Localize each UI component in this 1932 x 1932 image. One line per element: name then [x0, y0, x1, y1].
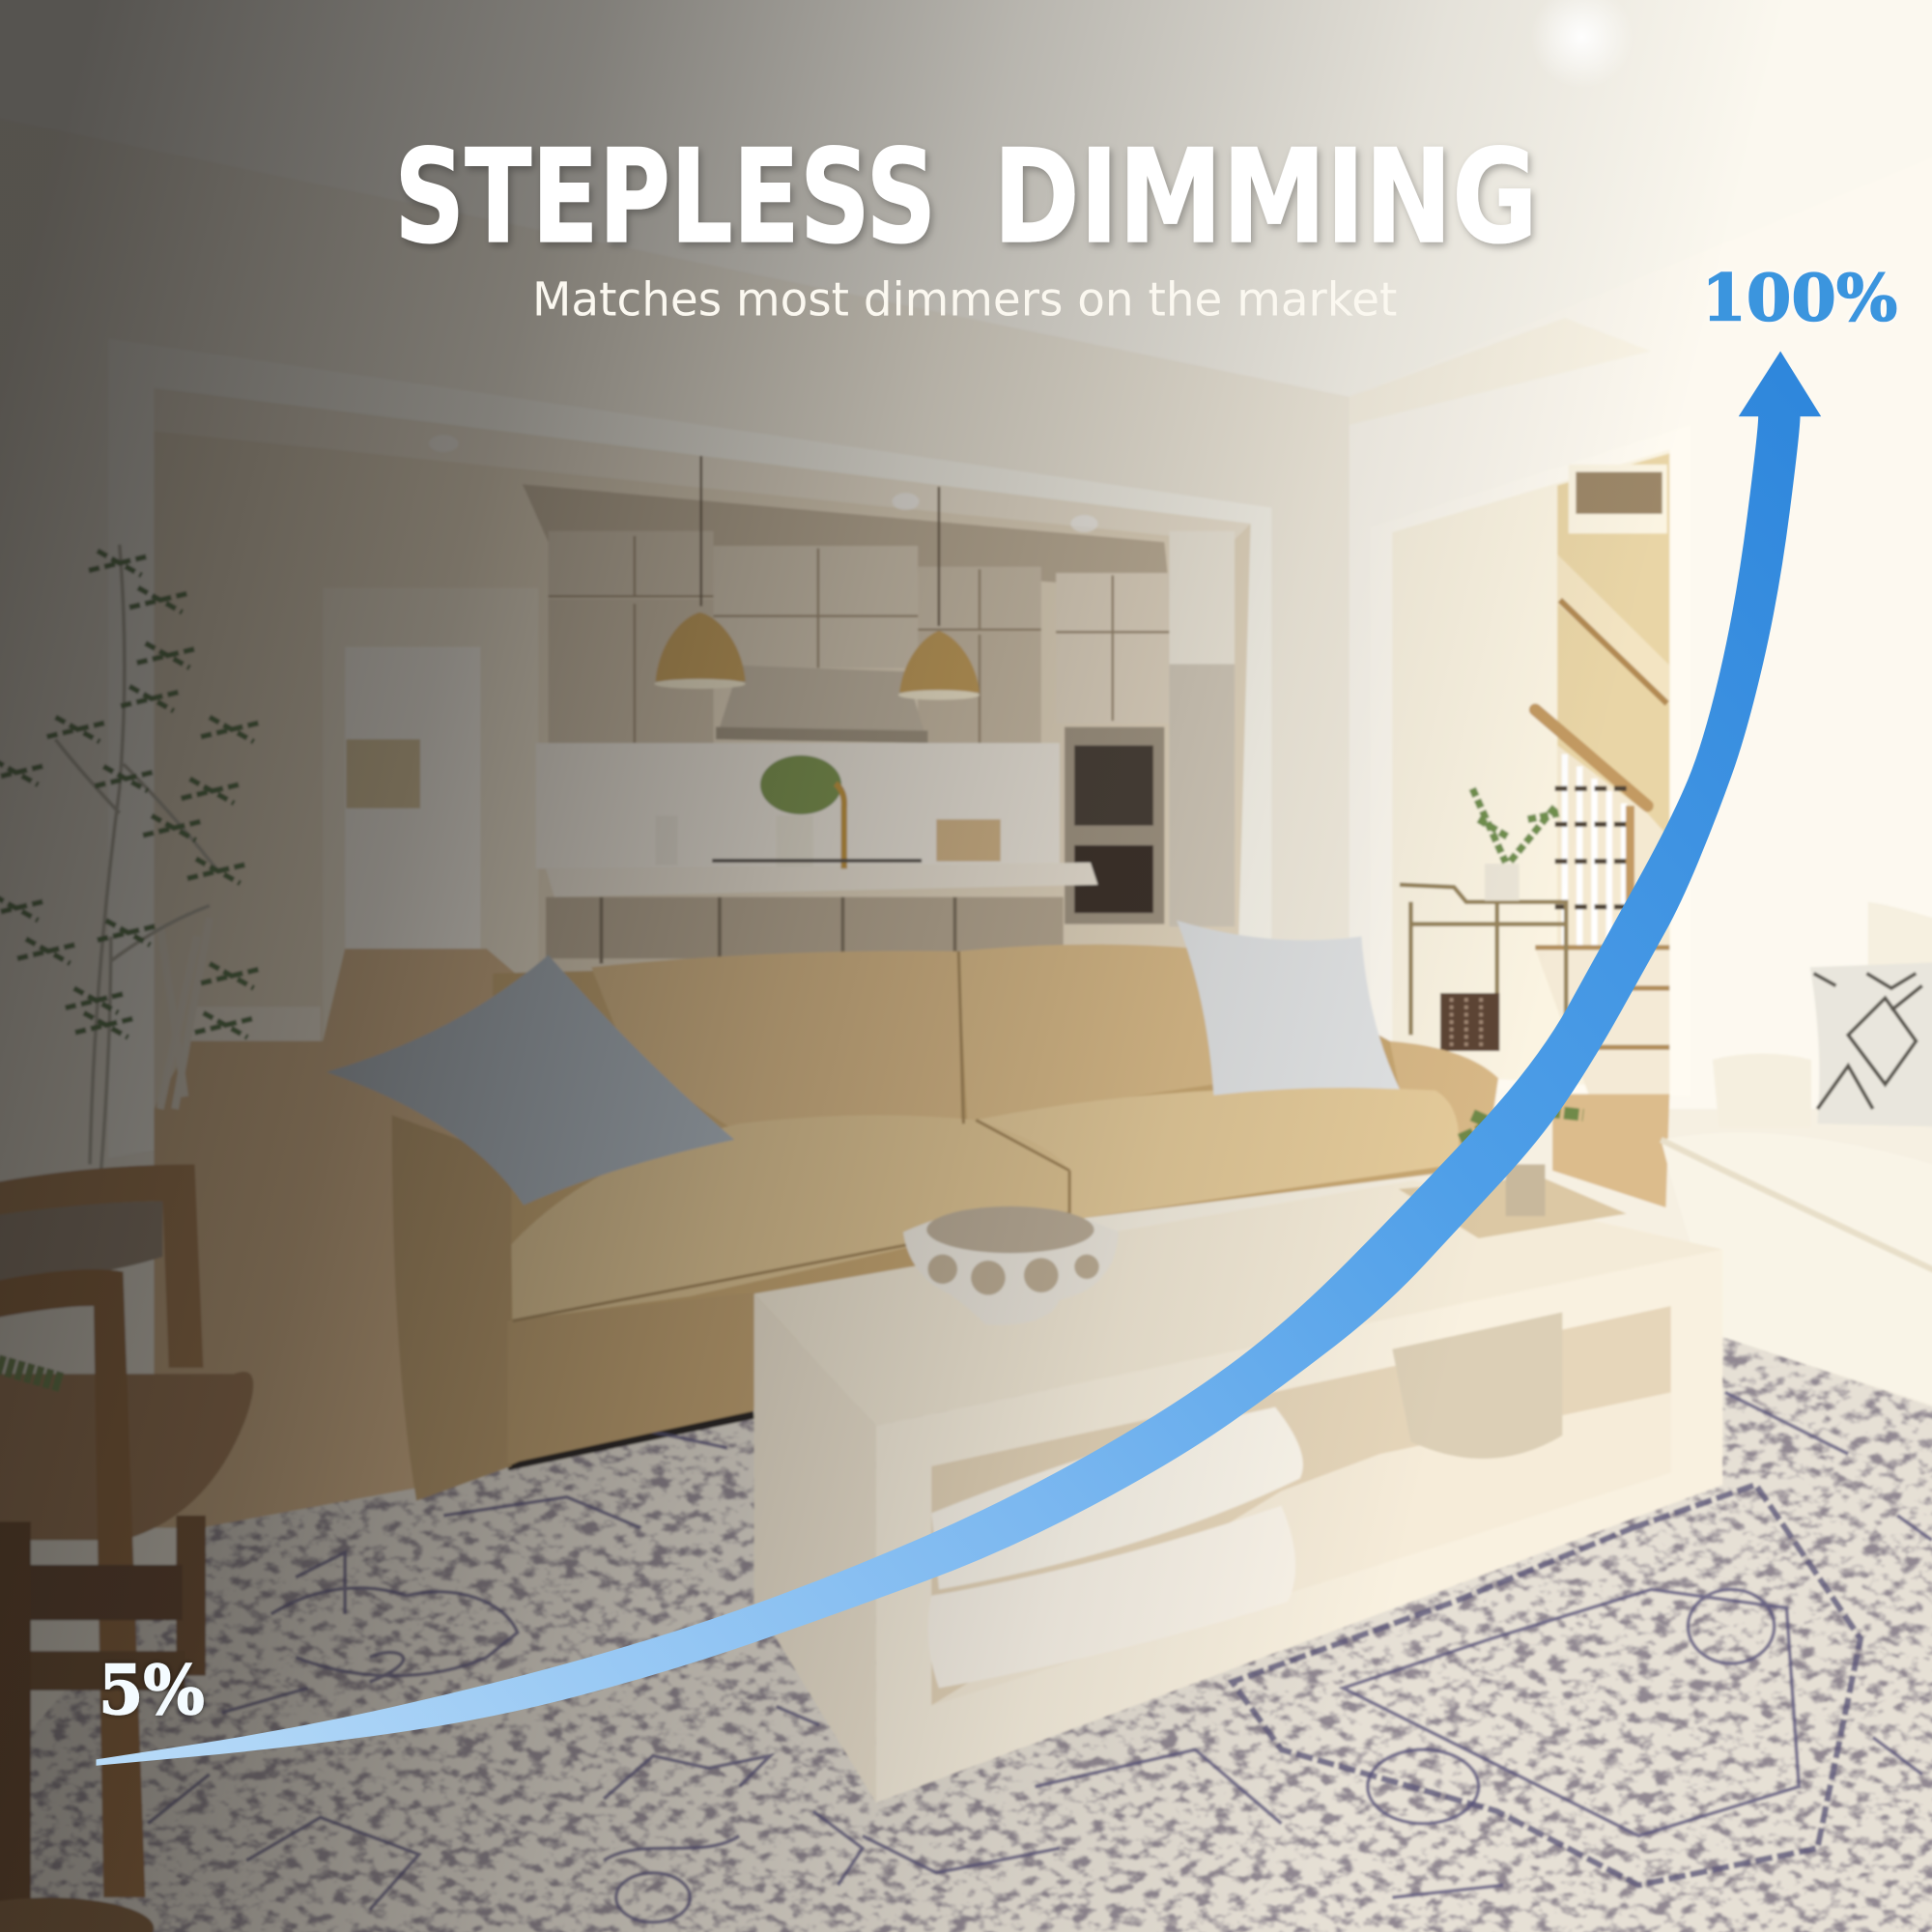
tall plant — [0, 545, 263, 1171]
kitchen counter items — [656, 755, 1001, 868]
armchair with pillow — [1661, 902, 1932, 1417]
coffee table — [754, 1180, 1722, 1803]
side cart with plant — [1400, 788, 1566, 1051]
decorative bowl — [903, 1207, 1119, 1325]
ceiling light glow — [1530, 0, 1634, 89]
subtitle: Matches most dimmers on the market — [532, 273, 1397, 327]
folded blankets — [928, 1407, 1303, 1688]
pendant lamps — [429, 435, 1097, 699]
pillow: white — [1177, 921, 1400, 1095]
kitchen doorway — [108, 339, 1271, 1528]
label: 5%: 5% — [99, 1650, 205, 1730]
rug — [25, 1337, 1932, 1932]
title: DIMMING — [993, 122, 1538, 272]
staircase doorway — [1370, 425, 1690, 1208]
brightness curve arrow from 5% to 100% — [96, 352, 1821, 1766]
kitchen cabinets — [523, 484, 1235, 963]
title: STEPLESS — [394, 122, 936, 272]
tray with small plant — [1399, 1109, 1627, 1238]
dining chairs — [0, 1164, 253, 1932]
label: 100%: 100% — [1701, 261, 1897, 336]
sofa — [392, 945, 1498, 1501]
woven basket — [1392, 1312, 1562, 1459]
pillow: blue-gray — [327, 955, 734, 1205]
